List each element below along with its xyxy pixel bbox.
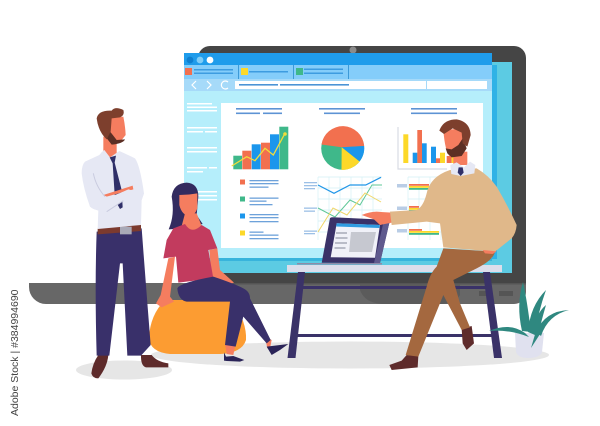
- arms: [88, 173, 144, 212]
- plant: [489, 282, 569, 358]
- trousers: [96, 228, 151, 356]
- monitor: [29, 46, 526, 304]
- belt: [98, 224, 141, 234]
- bar chart with trend line: [232, 127, 288, 169]
- head: [106, 117, 126, 144]
- collar: [450, 162, 475, 176]
- pouf: [149, 300, 246, 354]
- hair: [97, 108, 124, 139]
- face: [179, 193, 197, 217]
- trousers: [177, 277, 271, 347]
- address bar: [192, 81, 487, 89]
- blouse: [163, 224, 217, 283]
- calves: [225, 337, 272, 355]
- table: [287, 265, 502, 358]
- stock credit: Adobe Stock | #384994690: [9, 289, 21, 416]
- hand: [362, 212, 392, 225]
- neck: [453, 152, 467, 165]
- shoes: [224, 344, 288, 362]
- legend list: [240, 180, 278, 239]
- grouped bar chart: [398, 127, 455, 169]
- laptop: [297, 217, 390, 264]
- hair: [439, 119, 471, 147]
- line chart: [304, 177, 382, 240]
- shoes: [389, 326, 474, 370]
- sidebar lines: [187, 103, 217, 200]
- person: seated woman: [156, 183, 288, 362]
- browser window: [184, 53, 492, 261]
- window dots: [187, 57, 213, 63]
- neck: [103, 137, 117, 158]
- head: [443, 128, 464, 157]
- person: standing man: [82, 108, 168, 378]
- pie chart: [321, 126, 364, 170]
- person: seated presenter: [362, 119, 517, 370]
- neck: [182, 213, 202, 230]
- trousers: [406, 248, 495, 357]
- tie: [458, 167, 464, 176]
- sweater: [390, 168, 517, 252]
- beard: [106, 128, 125, 145]
- tie: [110, 156, 123, 209]
- tabs: [185, 65, 349, 79]
- shirt: [82, 150, 144, 229]
- pocket hand: [483, 250, 497, 254]
- arms: [156, 248, 234, 307]
- shoes: [91, 355, 168, 378]
- stacked bar rows: [397, 177, 446, 240]
- hair: [169, 183, 203, 229]
- chart titles: [236, 108, 457, 114]
- beard: [446, 138, 467, 157]
- floor shadow: [76, 342, 549, 380]
